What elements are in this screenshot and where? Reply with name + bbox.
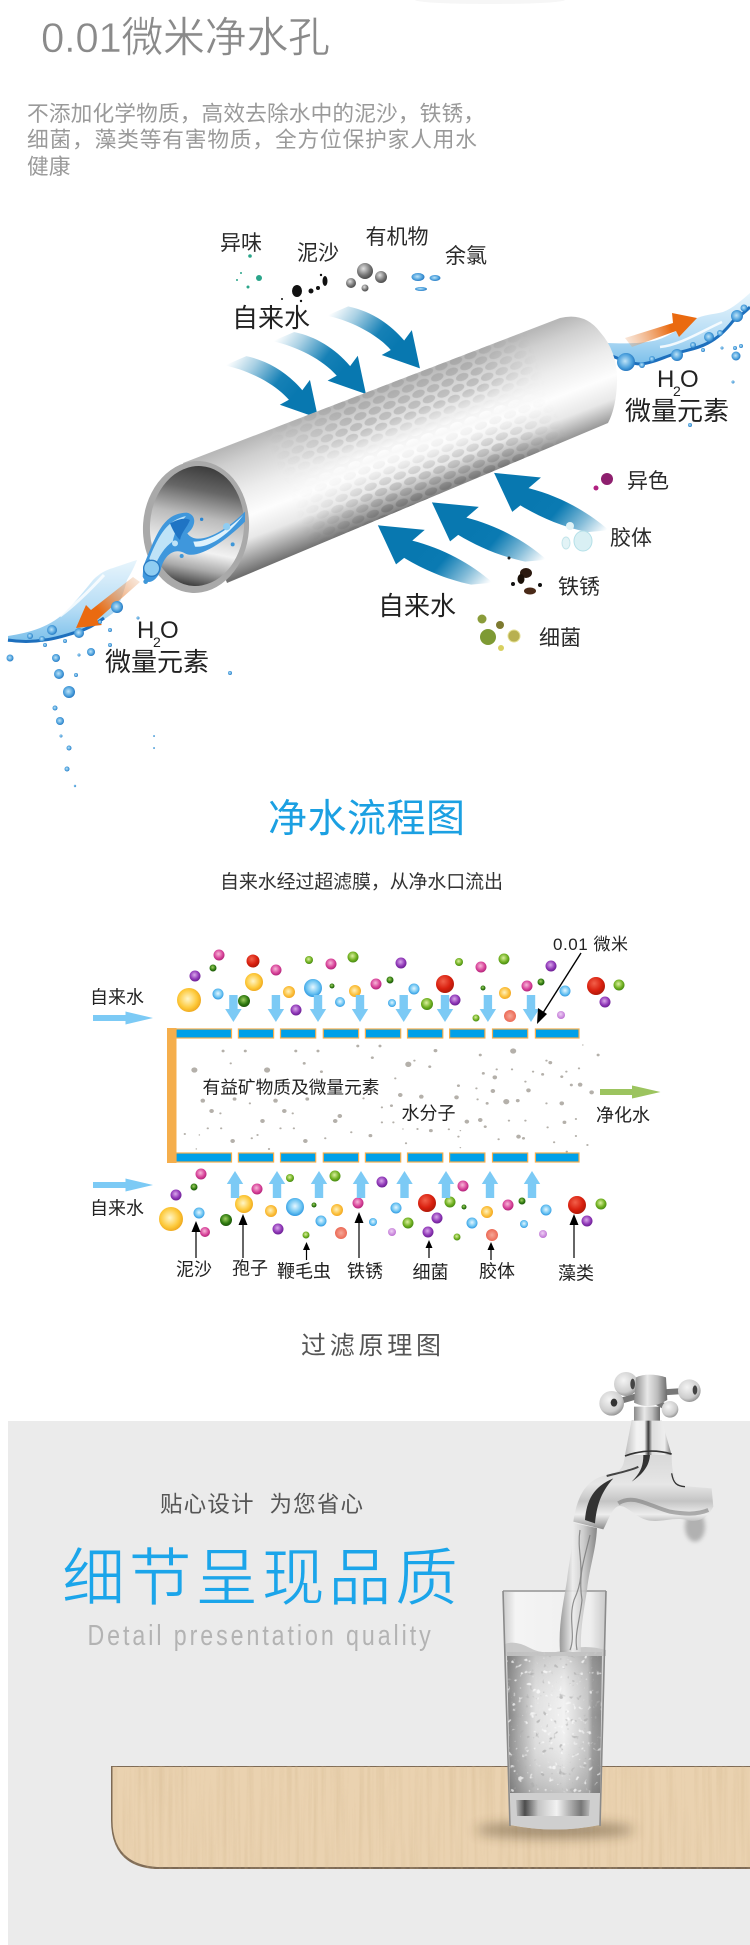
gray molecule dots	[184, 1044, 600, 1153]
label: 异色	[594, 470, 669, 493]
membrane frame	[167, 1028, 579, 1163]
label: 有机物	[346, 226, 428, 292]
blue arrows down	[225, 995, 539, 1022]
label: 自来水 top: 自来水	[232, 303, 310, 333]
label: H2O right	[657, 366, 699, 399]
label: 0.01 micron with pointer: 0.01 微米	[553, 935, 628, 954]
pointer labels: 铁锈	[347, 1262, 383, 1282]
label: 异色: 异色	[627, 470, 669, 493]
heading: 净水流程图: 净水流程图	[268, 798, 465, 841]
label: 余氯: 余氯	[445, 245, 487, 268]
faint top smudge	[415, 0, 565, 4]
intro paragraph: 健康	[27, 154, 70, 179]
label: 铁锈	[508, 556, 600, 599]
label: 余氯	[412, 245, 487, 291]
intro paragraph: 不添加化学物质，高效去除水中的泥沙，铁锈，	[27, 101, 485, 126]
label: 0.01 micron with pointer	[537, 935, 628, 1024]
label: 泥沙: 泥沙	[297, 242, 339, 265]
label: 自来水 top: 自来水	[90, 988, 144, 1008]
pointer labels: 细菌	[412, 1262, 448, 1282]
label: minerals: 有益矿物质及微量元素	[202, 1078, 380, 1098]
english subheading: Detail presentation quality	[88, 1618, 431, 1652]
pointer labels: 孢子	[232, 1258, 268, 1278]
pointer labels: 胶体	[479, 1262, 515, 1282]
label: 微量元素 right: 微量元素	[625, 396, 729, 426]
label: H2O left: H	[137, 617, 154, 644]
caption: 过滤原理图: 过滤原理图	[301, 1332, 441, 1360]
panel: flow diagram	[90, 935, 660, 1284]
contaminant balls bottom	[159, 1168, 606, 1241]
label: 铁锈: 铁锈	[558, 576, 600, 599]
gray background	[8, 1421, 750, 1945]
water right	[607, 293, 750, 427]
subheading: 自来水经过超滤膜，从净水口流出	[220, 871, 503, 893]
label: 微量元素 left: 微量元素	[105, 647, 209, 677]
panel: detail quality	[8, 1372, 750, 1945]
tagline: 贴心设计 为您省心	[160, 1492, 363, 1517]
blue arrows up	[227, 1171, 540, 1198]
label: 细菌	[478, 614, 581, 651]
label: H2O left: O	[160, 617, 179, 644]
label: H2O right: H	[657, 366, 674, 393]
label: 泥沙	[281, 242, 339, 302]
label: water molecule: 水分子	[402, 1104, 456, 1124]
label: 自来水 bottom: 自来水	[90, 1198, 144, 1218]
wood shelf	[111, 1766, 750, 1869]
intro paragraph	[27, 101, 485, 179]
headline: 细节呈现品质	[62, 1544, 458, 1614]
label: 有机物: 有机物	[366, 226, 428, 249]
label: H2O left: 2	[153, 634, 161, 650]
label: H2O right: 2	[673, 383, 681, 399]
label: purified water: 净化水	[596, 1106, 650, 1126]
pointer labels: 鞭毛虫	[277, 1262, 331, 1282]
title: 0.01微米净水孔	[41, 14, 330, 61]
tube body	[142, 316, 617, 593]
panel: filter tube diagram	[6, 226, 750, 787]
water drops	[52, 616, 232, 787]
label: 细菌: 细菌	[539, 627, 581, 650]
tube arrows bottom	[378, 473, 609, 585]
tube arrows top	[225, 306, 420, 418]
glass shadow	[475, 1822, 635, 1838]
label: H2O right: O	[680, 366, 699, 393]
arrow: purified water out	[600, 1086, 660, 1098]
label: 异味: 异味	[220, 232, 262, 255]
label: H2O left	[137, 617, 179, 650]
pointer labels: 藻类	[558, 1264, 594, 1284]
label: 自来水 bottom: 自来水	[378, 591, 456, 621]
label: 胶体	[562, 522, 652, 551]
arrow: tap water in bottom	[93, 1178, 153, 1192]
water stream	[560, 1523, 597, 1652]
contaminant balls top	[177, 950, 624, 1022]
label: 异味	[220, 232, 262, 288]
pointer labels	[176, 1212, 594, 1284]
water left	[6, 512, 245, 662]
faucet	[573, 1372, 713, 1542]
pointer labels: 泥沙	[176, 1260, 212, 1280]
label: 胶体: 胶体	[610, 527, 652, 550]
glass of water	[500, 1591, 610, 1830]
arrow: tap water in top	[93, 1012, 153, 1024]
intro paragraph: 细菌，藻类等有害物质，全方位保护家人用水	[27, 127, 477, 152]
